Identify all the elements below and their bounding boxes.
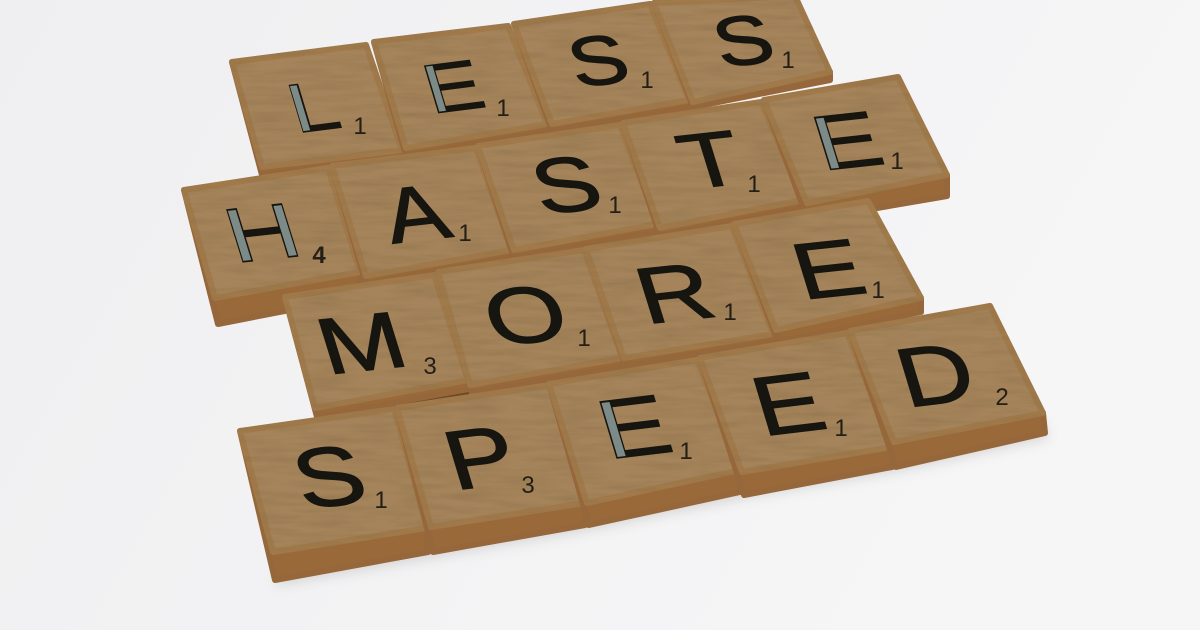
tile R: R (624, 245, 725, 341)
tile S (478, 125, 657, 258)
tile L: 1 (353, 113, 367, 140)
tile P: 3 (521, 472, 535, 499)
tile L: L (278, 66, 348, 148)
tile E: 1 (871, 277, 885, 304)
tile S: S (282, 428, 377, 527)
tile E: 1 (834, 415, 848, 442)
tile D: D (885, 326, 986, 426)
row: MORE (285, 201, 921, 417)
tile S: S (558, 19, 638, 102)
tile S: 1 (640, 67, 654, 94)
tile R: 1 (723, 299, 737, 326)
tile T: T (667, 114, 753, 205)
tile M (285, 275, 468, 417)
tile M: M (305, 295, 417, 391)
tile E: 1 (890, 148, 904, 175)
tile S: S (703, 0, 783, 82)
tile E (700, 333, 892, 495)
tile L (232, 45, 402, 175)
tile O (438, 250, 622, 393)
row: SPEED (240, 306, 1045, 580)
tiles (184, 0, 1045, 580)
tile M: 3 (423, 353, 437, 380)
tile S (654, 0, 830, 107)
tile E: E (741, 355, 836, 454)
tile E: E (802, 94, 893, 187)
tile P: P (433, 409, 528, 508)
tile P (397, 385, 585, 552)
tile S: S (521, 138, 612, 231)
tile A: 1 (458, 220, 472, 247)
tile O: O (472, 267, 578, 363)
tile E (734, 201, 921, 342)
tile T: 1 (747, 171, 761, 198)
tile H: H (214, 186, 311, 279)
tile S (240, 409, 428, 580)
tile E: 1 (679, 438, 693, 465)
tile E: E (587, 378, 682, 477)
tile T (623, 102, 803, 236)
tile E (374, 26, 547, 156)
tile S: 1 (781, 47, 795, 74)
tile S (514, 4, 689, 131)
tile O: 1 (577, 325, 591, 352)
tile D: 2 (995, 384, 1009, 411)
tile E (764, 77, 947, 220)
gap fill between tiles (215, 95, 890, 530)
tile S: 1 (608, 192, 622, 219)
tile A (332, 148, 511, 284)
tile H: 4 (312, 242, 326, 269)
tile H (184, 168, 362, 324)
row: HASTE (184, 77, 947, 324)
tile E (549, 360, 740, 525)
tile R (586, 226, 773, 366)
tile E: 1 (496, 95, 510, 122)
row: LESS (232, 0, 830, 175)
tile D (850, 306, 1045, 467)
tile E: E (781, 221, 876, 317)
tile E: E (413, 45, 493, 128)
tile S: 1 (374, 487, 388, 514)
tile shadow (275, 420, 1050, 586)
tile A: A (371, 168, 460, 260)
